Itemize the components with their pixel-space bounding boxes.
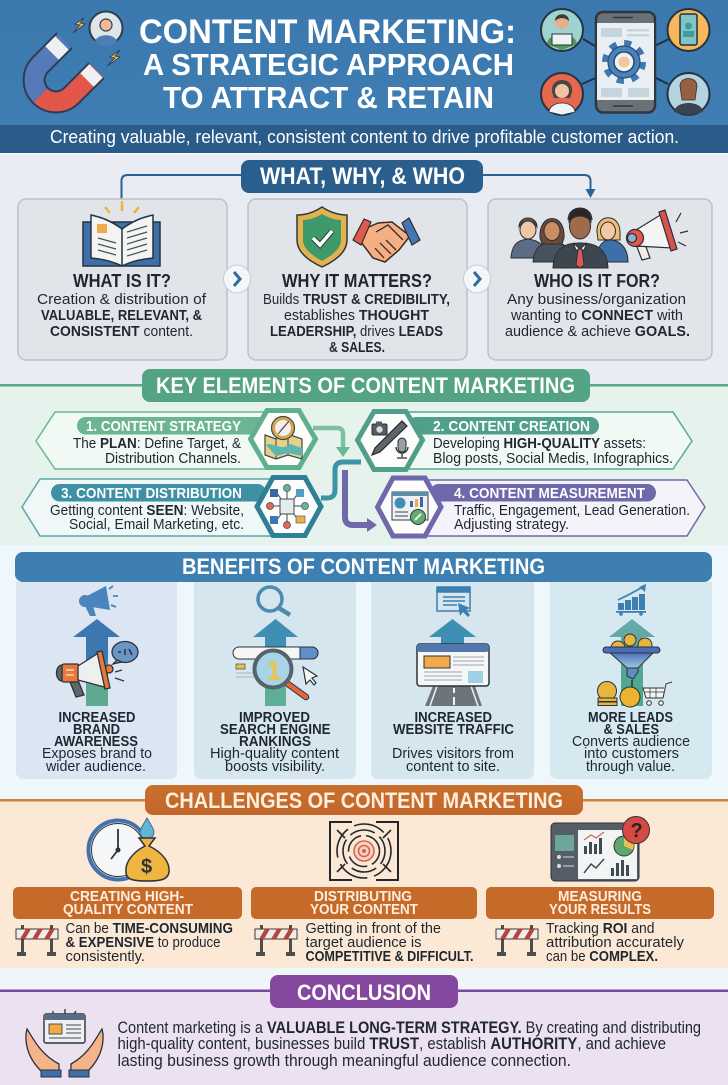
panel: what is it: WHAT IS IT? [73, 271, 171, 291]
panel: increased website traffic: content to site. [406, 758, 500, 775]
title: CONTENT MARKETING: [139, 13, 516, 51]
icon: search bar and number one magnifier: 1 [266, 655, 282, 686]
panel: what is it: Creation & distribution of [37, 291, 207, 308]
panel: increased brand awareness [16, 582, 177, 779]
panel: increased brand awareness: INCREASED [58, 710, 136, 726]
arrow: distribution to measurement flow [345, 470, 377, 532]
subtitle band [0, 125, 728, 155]
icon: rising arrow [609, 619, 655, 706]
panel: creating high-quality content: & EXPENSIVE to produce [66, 934, 220, 951]
panel: content distribution: 3. CONTENT DISTRIBUTION [61, 485, 242, 502]
icon: megaphone with speech bubble [56, 642, 138, 697]
title [139, 13, 516, 115]
icon: open book [83, 201, 160, 266]
panel: measuring your results: Tracking ROI and [546, 920, 655, 937]
panel: content measurement [378, 478, 705, 536]
icon: rising arrow [429, 619, 476, 660]
panel: measuring your results [486, 816, 714, 965]
panel: distributing your content [251, 822, 477, 965]
conclusion text [118, 1018, 701, 1070]
panel: increased brand awareness: wider audience. [45, 758, 146, 775]
icon: analytics window [378, 478, 441, 536]
panel: content strategy: Distribution Channels. [105, 450, 241, 467]
icon: chevron between cards 2 and 3 [464, 265, 490, 293]
heading: benefits: BENEFITS OF CONTENT MARKETING [182, 554, 545, 579]
panel: content strategy: The PLAN: Define Target, & [73, 435, 241, 452]
icon: funnel with coins and cart [598, 634, 672, 707]
panel: distributing your content: YOUR CONTENT [310, 901, 418, 918]
panel: creating high-quality content: Can be TIME-CONSUMING [66, 920, 233, 937]
panel: who is it for [488, 199, 712, 360]
icon: small browser with cursor [437, 587, 470, 617]
icon: search bar and number one magnifier [233, 647, 318, 697]
heading: benefits [15, 552, 712, 582]
panel: who is it for: Any business/organization [507, 291, 686, 308]
panel: more leads and sales: Converts audience [572, 733, 690, 750]
panel: increased website traffic [371, 582, 534, 779]
panel: content creation: 2. CONTENT CREATION [433, 418, 590, 435]
panel: more leads and sales: through value. [586, 758, 675, 775]
icon: small magnifying glass [258, 587, 290, 615]
conclusion text: lasting business growth through meaningful audience connection. [118, 1051, 571, 1070]
heading: conclusion [270, 975, 458, 1008]
section: key elements divider line [0, 384, 728, 386]
icon: road barrier [255, 925, 297, 956]
panel: what is it: VALUABLE, RELEVANT, & [41, 307, 202, 324]
icon: network of channels [257, 478, 321, 536]
title: TO ATTRACT & RETAIN [163, 80, 494, 115]
panel: increased website traffic: INCREASED [414, 710, 492, 726]
panel: why it matters: establishes THOUGHT [284, 307, 429, 324]
panel: measuring your results: MEASURING [558, 888, 642, 905]
connector: what why who heading to cards [122, 175, 596, 199]
panel: what is it: CONSISTENT content. [50, 323, 193, 340]
panel: creating high-quality content: consistently. [66, 948, 145, 965]
header banner [0, 0, 728, 125]
panel: content creation [358, 412, 692, 470]
icon: road barrier [496, 925, 538, 956]
icon: small megaphone [79, 586, 118, 616]
heading: conclusion: CONCLUSION [297, 980, 431, 1005]
icon: clock and money bag [88, 818, 169, 881]
panel: more leads and sales [550, 582, 712, 779]
panel: content creation: Developing HIGH-QUALITY assets: [433, 435, 646, 452]
panel: content measurement: 4. CONTENT MEASUREMENT [454, 485, 645, 502]
arrow: creation to distribution flow [321, 462, 361, 498]
panel: distributing your content: COMPETITIVE & DIFFICULT. [306, 948, 474, 965]
panel: content distribution [22, 478, 321, 536]
icon: growth bars on cart [616, 584, 646, 616]
panel: improved search rankings: High-quality content [210, 745, 340, 762]
icon: maze with target [330, 822, 398, 880]
section: challenges divider line [0, 799, 728, 802]
panel: content measurement: Adjusting strategy. [454, 516, 569, 533]
title: A STRATEGIC APPROACH [143, 47, 514, 82]
panel: distributing your content: target audience is [306, 934, 422, 951]
icon: road under website [425, 686, 482, 706]
panel: content creation: Blog posts, Social Medis, Infographics. [433, 450, 673, 467]
panel: why it matters: Builds TRUST & CREDIBILITY, [263, 291, 450, 308]
panel: creating high-quality content [13, 818, 242, 965]
heading: key elements: KEY ELEMENTS OF CONTENT MARKETING [156, 373, 575, 398]
panel: distributing your content: DISTRIBUTING [314, 888, 412, 905]
icon: compass and map [250, 410, 316, 468]
panel: who is it for: audience & achieve GOALS. [505, 323, 690, 340]
panel: why it matters [248, 199, 467, 360]
icon: team of people [511, 208, 628, 268]
panel: why it matters: & SALES. [329, 339, 385, 356]
panel: improved search rankings [194, 582, 356, 779]
icon: magnet with person [34, 12, 122, 102]
panel: content strategy: 1. CONTENT STRATEGY [86, 418, 241, 435]
panel: improved search rankings: SEARCH ENGINE [220, 722, 331, 738]
panel: measuring your results: can be COMPLEX. [546, 948, 658, 965]
conclusion text: Content marketing is a VALUABLE LONG-TERM STRATEGY. By creating and distributing [118, 1018, 701, 1037]
panel: creating high-quality content: CREATING HIGH- [70, 888, 184, 905]
icon: rising arrow [73, 619, 120, 706]
conclusion text: high-quality content, businesses build TRUST, establish AUTHORITY, and achieve [118, 1034, 666, 1053]
heading: what why who: WHAT, WHY, & WHO [260, 163, 465, 190]
panel: who is it for: wanting to CONNECT with [510, 307, 683, 324]
heading: challenges: CHALLENGES OF CONTENT MARKETING [165, 788, 563, 813]
panel: distributing your content: Getting in front of the [306, 920, 441, 937]
panel: improved search rankings: IMPROVED [239, 710, 310, 726]
panel: creating high-quality content: QUALITY CONTENT [63, 901, 193, 918]
panel: measuring your results: attribution accurately [546, 934, 684, 951]
panel: more leads and sales: & SALES [604, 722, 659, 738]
panel: who is it for: WHO IS IT FOR? [534, 271, 660, 291]
icon: shield with check [297, 207, 347, 267]
panel: content distribution: Getting content SEEN: Website, [50, 502, 244, 519]
subtitle band: Creating valuable, relevant, consistent content to drive profitable customer action. [50, 127, 679, 147]
panel: increased brand awareness: AWARENESS [54, 734, 138, 750]
arrow: strategy to creation flow [313, 428, 350, 457]
icon: camera pen microphone [358, 412, 422, 470]
panel: what is it [18, 199, 227, 360]
panel: why it matters: WHY IT MATTERS? [282, 271, 432, 291]
icon: phone with gear and audience avatars [541, 9, 710, 115]
panel: increased brand awareness: Exposes brand to [42, 745, 152, 762]
panel: why it matters: LEADERSHIP, drives LEADS [270, 323, 443, 340]
panel: more leads and sales: into customers [584, 745, 679, 762]
icon: handshake [353, 218, 420, 262]
icon: hands holding content window [26, 1009, 103, 1077]
icon: browser window [417, 644, 489, 686]
icon: chevron between cards 1 and 2 [224, 265, 250, 293]
panel: content measurement: Traffic, Engagement, Lead Generation. [454, 502, 690, 519]
icon: clock and money bag: $ [141, 856, 152, 878]
panel: improved search rankings: RANKINGS [239, 734, 311, 750]
icon: rising arrow [253, 619, 298, 706]
icon: analytics dashboard with question mark: ? [630, 820, 643, 842]
icon: megaphone [626, 210, 688, 260]
panel: improved search rankings: boosts visibility. [225, 758, 325, 775]
panel: increased website traffic: WEBSITE TRAFFIC [393, 722, 514, 738]
panel: increased website traffic: Drives visitors from [392, 745, 514, 762]
icon: analytics dashboard with question mark [551, 816, 650, 881]
section: conclusion divider line [0, 990, 728, 992]
panel: increased brand awareness: BRAND [73, 722, 120, 738]
icon: road barrier [16, 925, 58, 956]
panel: content distribution: Social, Email Marketing, etc. [69, 516, 244, 533]
panel: measuring your results: YOUR RESULTS [549, 901, 651, 918]
panel: more leads and sales: MORE LEADS [588, 710, 673, 726]
panel: content strategy [36, 410, 316, 469]
